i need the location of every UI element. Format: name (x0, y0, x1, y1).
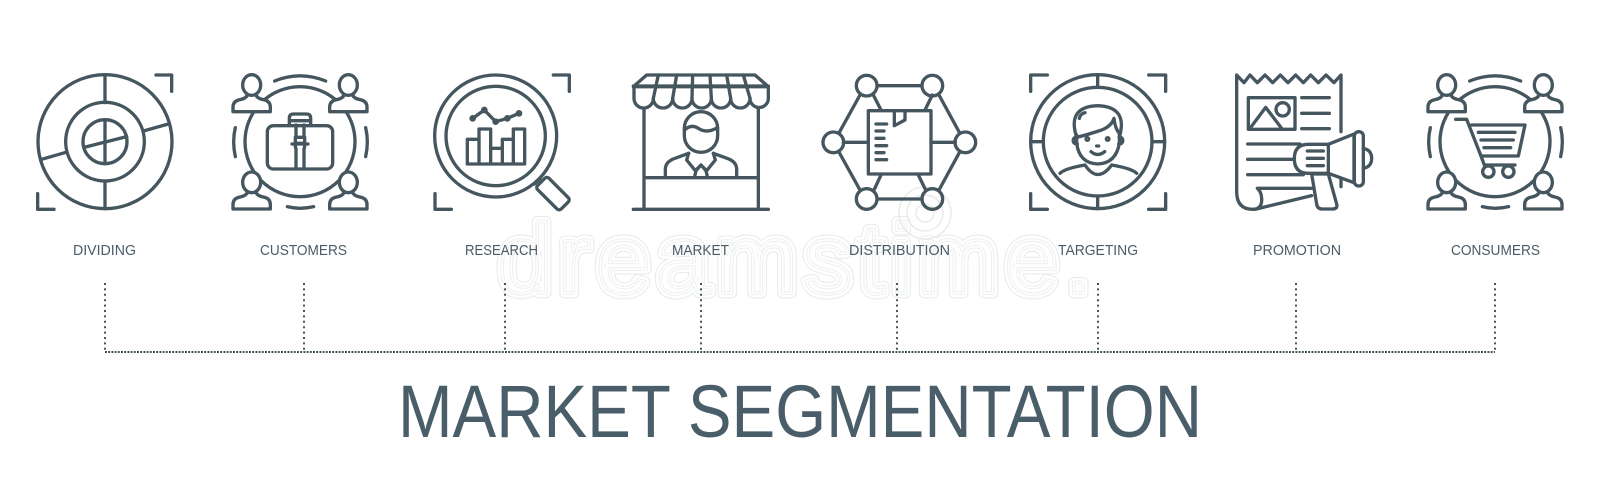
icon: market (633, 75, 768, 209)
watermark: dreamstime. (498, 204, 1092, 314)
labels: TARGETING (1058, 242, 1138, 259)
icon: research (435, 75, 570, 211)
icon: promotion (1237, 75, 1372, 209)
title: MARKET SEGMENTATION (398, 370, 1202, 453)
icon: targeting (1031, 75, 1166, 209)
labels: CONSUMERS (1451, 242, 1540, 259)
icon: dividing (38, 75, 172, 209)
labels: CUSTOMERS (260, 242, 347, 259)
icon: customers (233, 75, 367, 209)
watermark: dreamstime. (498, 204, 1092, 314)
labels (73, 242, 1540, 259)
watermark: dreamstime. (498, 204, 1092, 314)
icon: consumers (1428, 75, 1562, 209)
labels: PROMOTION (1253, 242, 1341, 259)
watermark: dreamstime. (498, 204, 1092, 314)
icon: distribution (823, 75, 976, 209)
labels: DIVIDING (73, 242, 136, 259)
labels: DISTRIBUTION (849, 242, 950, 259)
labels: MARKET (672, 242, 729, 259)
labels: RESEARCH (465, 242, 538, 259)
dotted connector (105, 283, 1495, 352)
